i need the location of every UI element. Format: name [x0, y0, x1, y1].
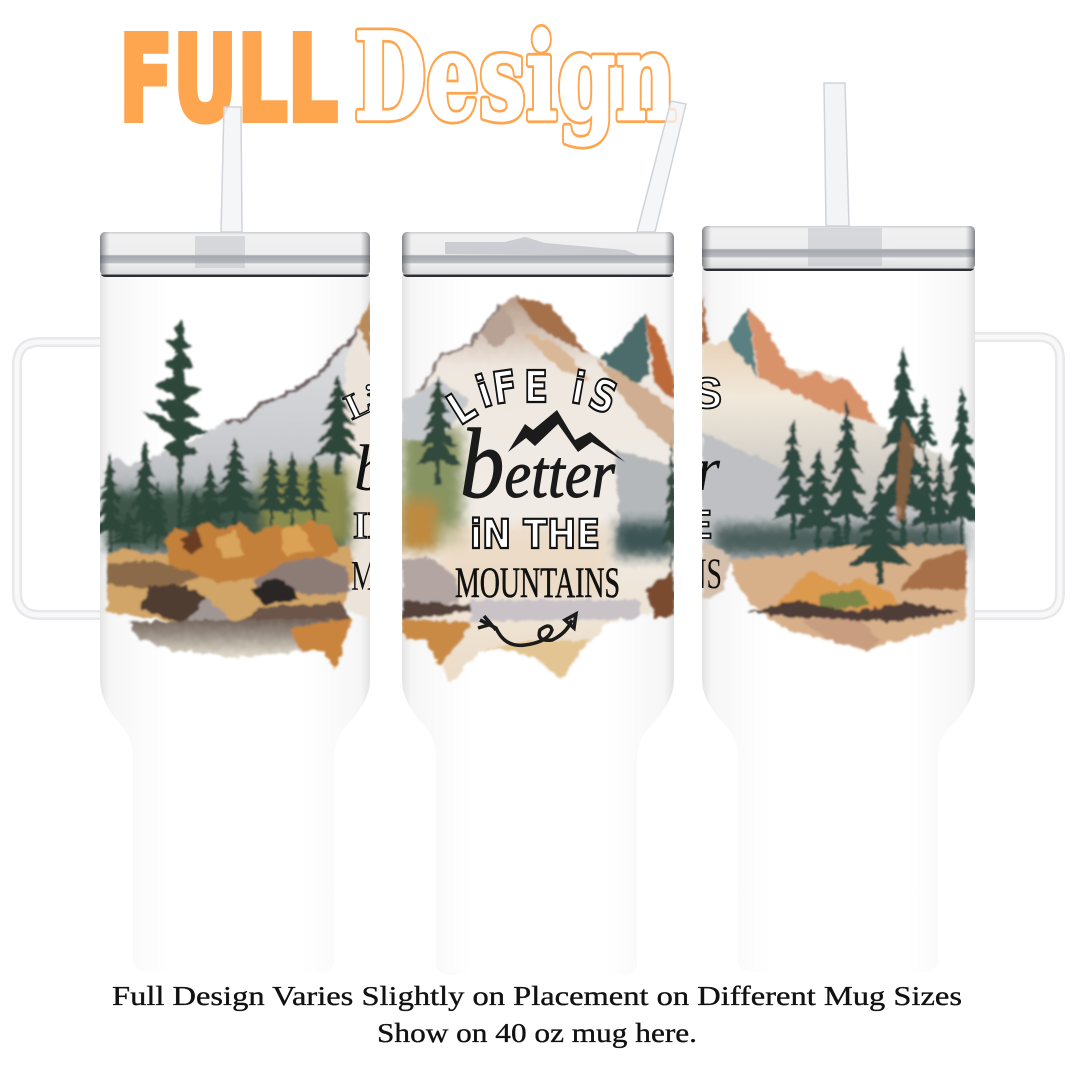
IN THE: iN THE [470, 512, 600, 558]
MOUNTAINS: MOUNTAINS [455, 560, 620, 607]
lid [100, 232, 370, 277]
LIFE IS: i [471, 366, 498, 419]
wrap artwork [402, 297, 682, 682]
title word: Design [354, 7, 676, 148]
LIFE IS: i [568, 363, 589, 415]
straw: right mug [824, 83, 849, 226]
LIFE IS: F [489, 361, 520, 415]
arrow [478, 614, 576, 645]
LIFE IS: S [582, 369, 623, 425]
wrapped slogan text fragment: S [693, 369, 722, 418]
mug: middle [402, 232, 674, 716]
footer caption [112, 981, 962, 1048]
handle [975, 337, 1060, 615]
title word: Design: Design [354, 7, 676, 148]
caption line 1: Full Design Varies Slightly on Placement on Different Mug Sizes [112, 981, 962, 1011]
lid [402, 232, 674, 277]
mug: right [702, 226, 1065, 716]
small mountain icon [508, 410, 625, 462]
mug: left [12, 232, 370, 716]
better: better [460, 408, 615, 519]
wrapped slogan text fragment: MOUNTAINS [557, 551, 722, 598]
landscape scene [702, 295, 982, 650]
title word: FULL: FULL [119, 10, 338, 148]
wrap artwork [100, 300, 370, 671]
LIFE IS [444, 368, 618, 426]
landscape scene [94, 300, 372, 670]
wrapped slogan text fragment: E [685, 503, 712, 547]
slogan lettering [439, 361, 625, 645]
wrapped slogan text fragment: r [696, 436, 721, 504]
landscape scene [402, 297, 682, 682]
LIFE IS: E [524, 362, 548, 413]
straw: middle mug [637, 101, 686, 232]
caption line 2: Show on 40 oz mug here. [377, 1018, 697, 1048]
body [100, 276, 370, 972]
handle [17, 342, 100, 615]
body [702, 270, 975, 972]
LIFE IS: L [439, 380, 485, 435]
wrapped slogan text fragment: IN [353, 505, 395, 547]
straw: left mug [221, 107, 242, 232]
title [119, 7, 676, 148]
wrap artwork [702, 296, 975, 653]
body [402, 276, 674, 975]
wrapped slogan text fragment: be [354, 432, 416, 505]
title word: Design: Design [354, 7, 676, 148]
wrapped slogan text fragment [342, 384, 370, 590]
lid [702, 226, 975, 271]
wrapped slogan text fragment [702, 376, 722, 588]
wrapped slogan text fragment: Li [338, 377, 386, 427]
wrapped slogan text fragment: MOUNTAINS [351, 554, 516, 600]
